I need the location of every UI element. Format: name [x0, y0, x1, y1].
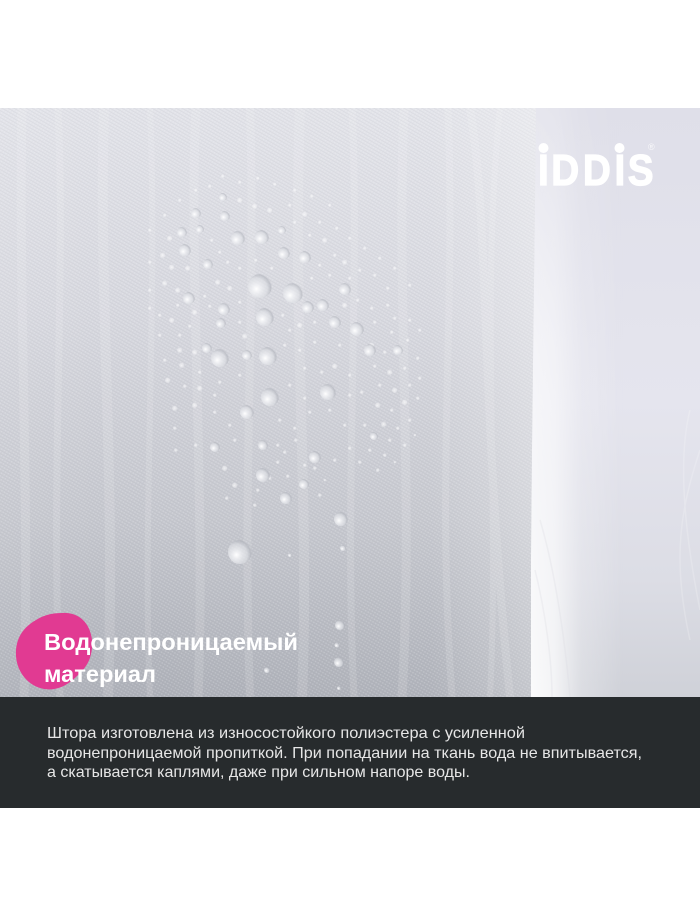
curtain back panel — [532, 108, 700, 697]
logo: IDDIS: ® — [648, 142, 655, 152]
description text: а скатывается каплями, даже при сильном напоре воды. — [47, 764, 470, 781]
small water drops — [148, 174, 422, 507]
heading — [44, 629, 298, 687]
infographic canvas — [0, 108, 700, 808]
description band — [0, 697, 700, 808]
description text — [47, 725, 642, 781]
photo: fabric with water drops — [0, 108, 700, 697]
icon: pink blob — [16, 613, 92, 689]
fabric stripes — [20, 592, 493, 697]
logo: IDDIS: IDDIS — [538, 145, 654, 195]
heading: материал — [44, 661, 156, 687]
large water drops — [177, 193, 403, 690]
curtain front panel: woven fabric — [0, 108, 536, 697]
heading: Водонепроницаемый — [44, 629, 298, 655]
description text: Штора изготовлена из износостойкого полиэстера с усиленной — [47, 725, 525, 742]
description text: водонепроницаемой пропиткой. При попадании на ткань вода не впитывается, — [47, 745, 642, 762]
